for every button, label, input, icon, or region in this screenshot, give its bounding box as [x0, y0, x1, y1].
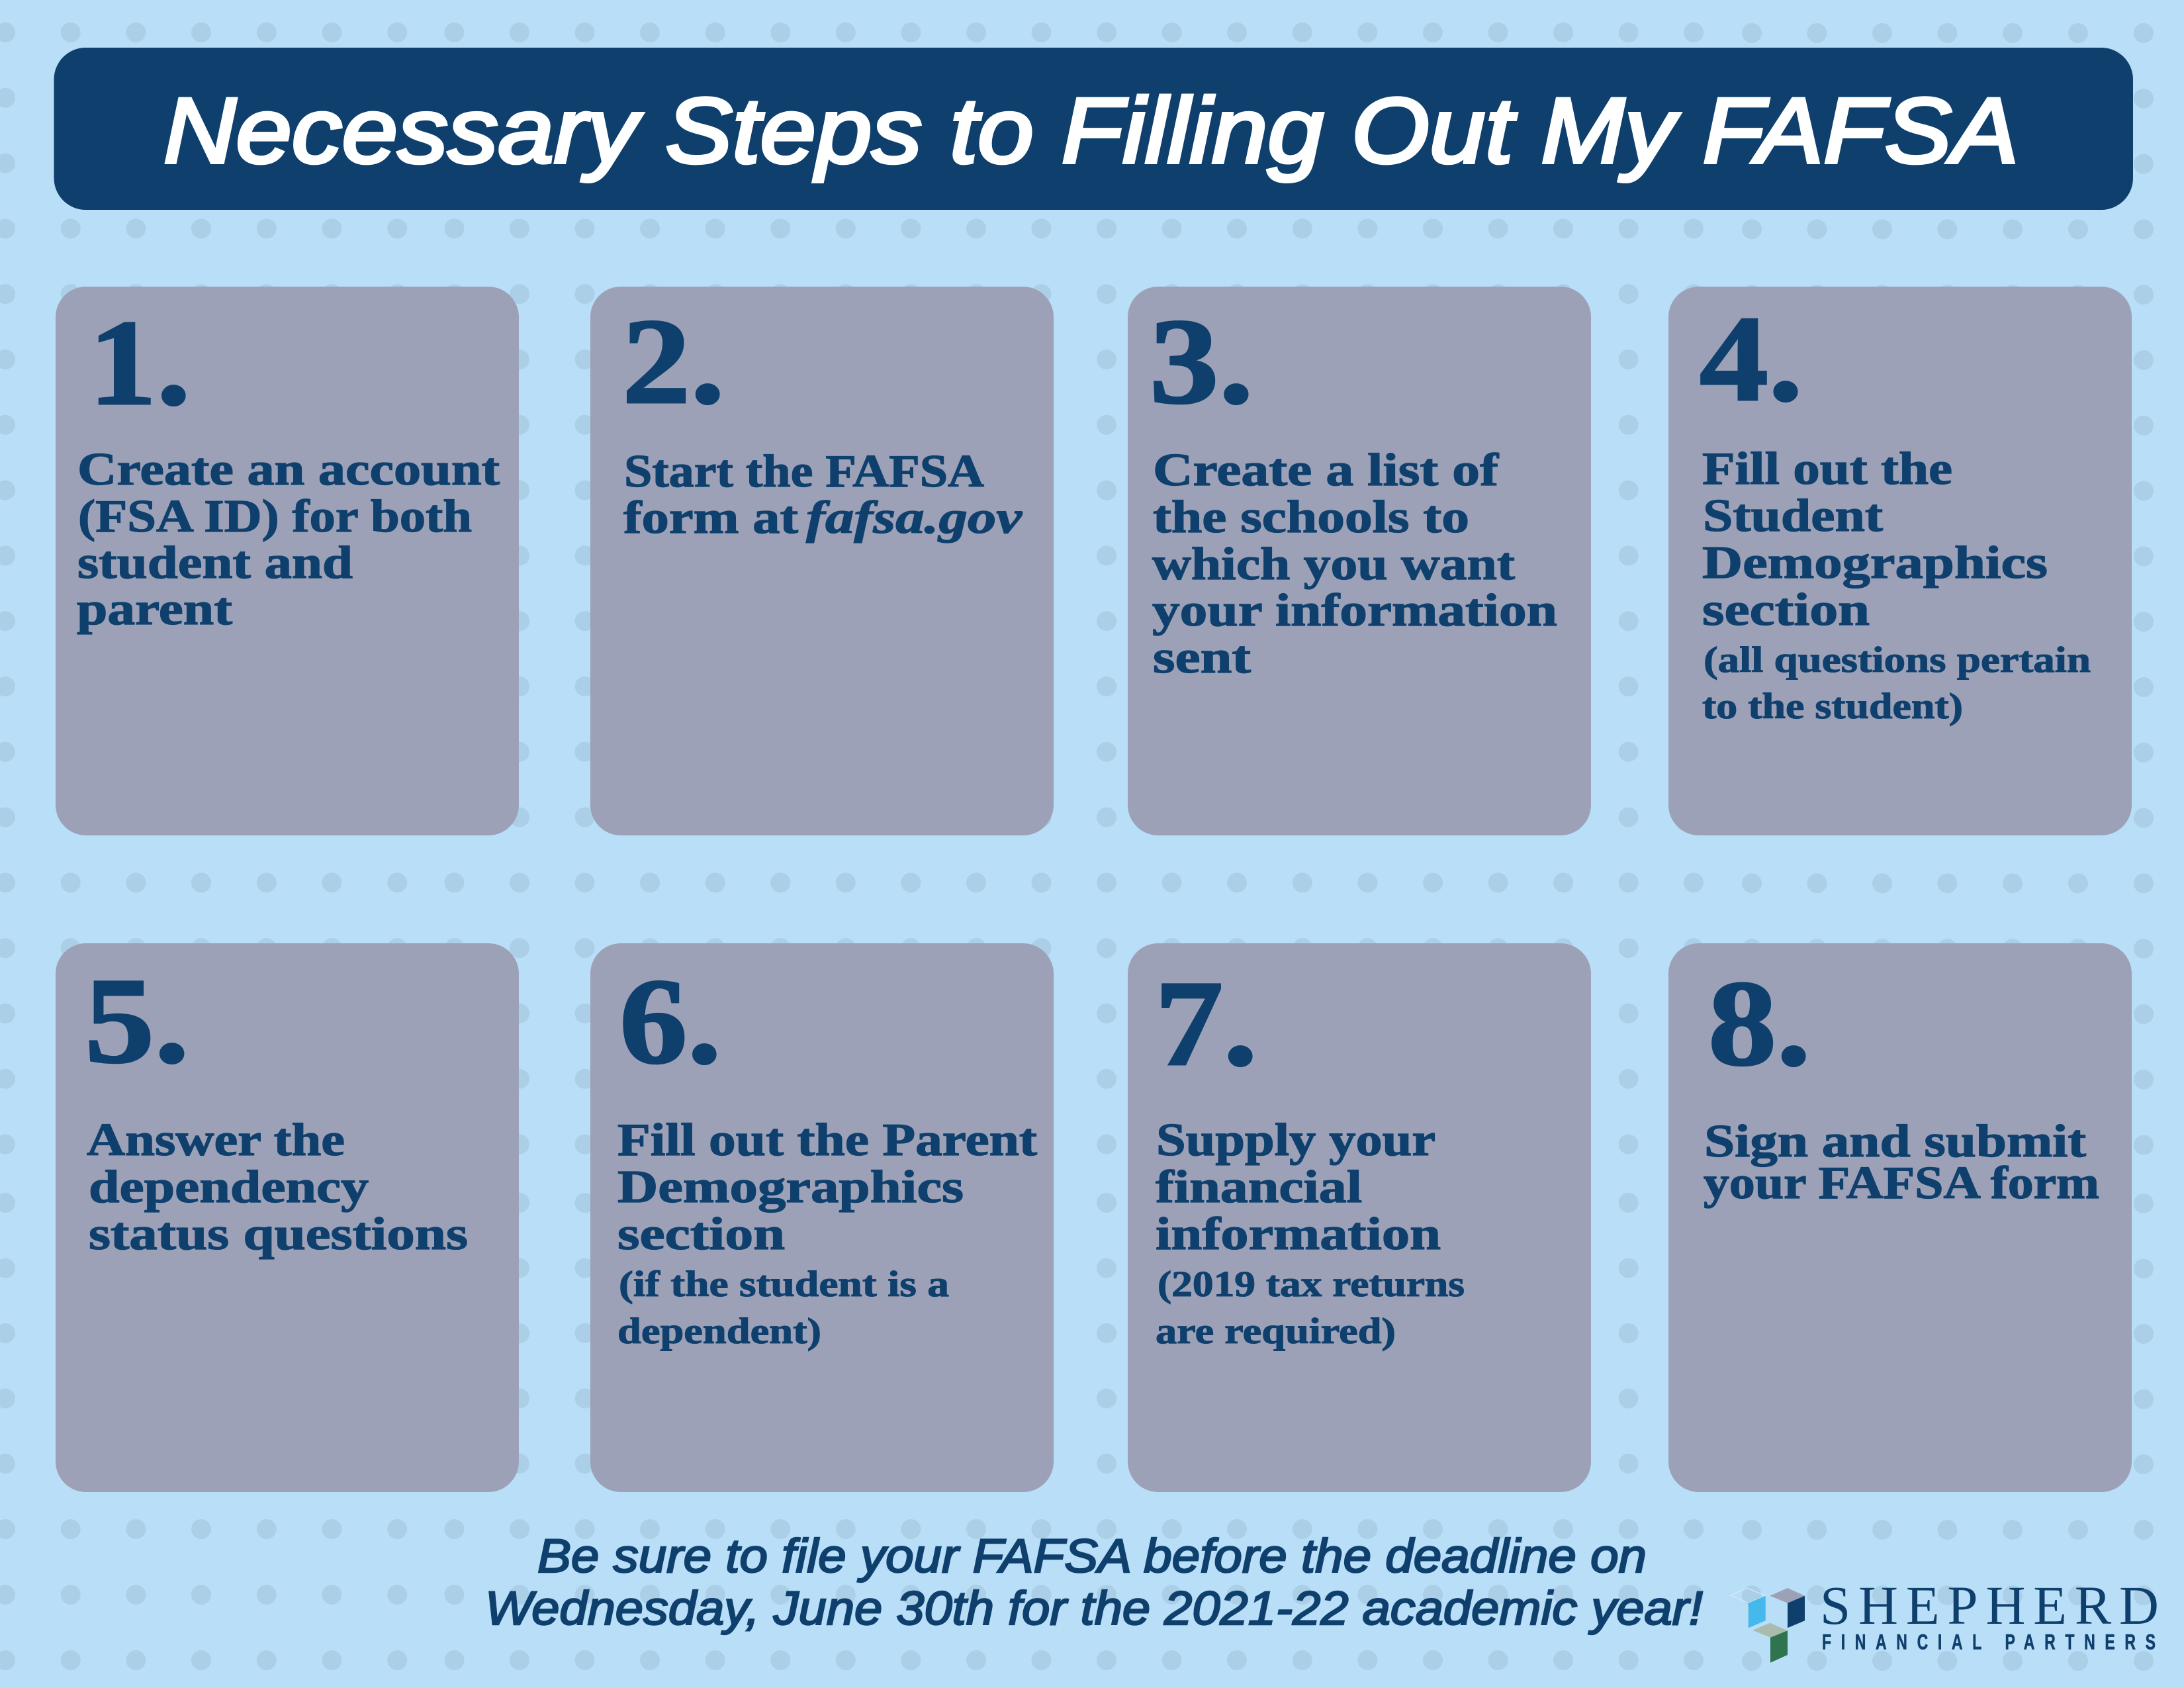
panel: step 6 — [590, 943, 1054, 1492]
step 7 text: financial — [1156, 1162, 1362, 1213]
step 4 text: section — [1702, 585, 1870, 635]
step 4 text — [1702, 444, 2091, 726]
step 8 text: your FAFSA form — [1704, 1158, 2099, 1209]
step 3 text — [1152, 445, 1557, 683]
step 3 text: sent — [1153, 632, 1251, 683]
step 1 text — [77, 444, 500, 635]
step 5 text — [87, 1115, 468, 1260]
step 6 text: Fill out the Parent — [617, 1115, 1037, 1166]
step 1 text: Create an account — [77, 444, 500, 495]
logo wordmark: SHEPHERD — [1820, 1575, 2159, 1636]
footer note: Be sure to file your FAFSA before the deadline on — [537, 1530, 1647, 1583]
title: Necessary Steps to Filling Out My FAFSA — [163, 78, 2019, 183]
step 6 text: section — [617, 1209, 785, 1260]
step 2 text: Start the FAFSA — [624, 446, 984, 497]
step 7 text: Supply your — [1156, 1115, 1435, 1166]
step 6 text: Demographics — [617, 1162, 964, 1213]
step 6 text — [617, 1115, 1037, 1351]
footer note: Wednesday, June 30th for the 2021-22 academic year! — [485, 1583, 1703, 1635]
step 4 text: Student — [1703, 491, 1883, 541]
logo tagline: FINANCIAL PARTNERS — [1822, 1630, 2156, 1654]
step 1 text: (FSA ID) for both — [78, 491, 472, 542]
icon: stacked cubes — [1731, 1588, 1805, 1663]
step 2 text: fafsa.gov — [806, 492, 1023, 543]
step 3 text: which you want — [1152, 539, 1515, 590]
step 4 text: to the student) — [1702, 686, 1963, 726]
panel: step 5 — [56, 943, 519, 1492]
step 4 text: Demographics — [1702, 538, 2048, 588]
step 5 text: Answer the — [87, 1115, 345, 1166]
panel: step 4 — [1668, 287, 2132, 835]
step 2 text — [623, 446, 1023, 543]
step 5 text: status questions — [89, 1209, 468, 1260]
step number 1: 1. — [89, 295, 191, 431]
title banner — [54, 48, 2133, 210]
step 7 text: (2019 tax returns — [1158, 1264, 1465, 1304]
step 7 text: information — [1156, 1209, 1441, 1260]
step 3 text: your information — [1152, 585, 1557, 636]
panel: step 8 — [1668, 943, 2132, 1492]
step 7 text — [1156, 1115, 1465, 1351]
step number 6: 6. — [619, 954, 721, 1090]
step number 2: 2. — [622, 294, 725, 430]
step 1 text: parent — [77, 584, 232, 635]
step 4 text: Fill out the — [1702, 444, 1952, 494]
panel: step 7 — [1128, 943, 1591, 1492]
step number 4: 4. — [1700, 291, 1803, 427]
step 2 text: form at — [623, 492, 798, 543]
panel: step 2 — [590, 287, 1054, 835]
step number 7: 7. — [1155, 956, 1257, 1092]
step 8 text: Sign and submit — [1704, 1116, 2086, 1167]
step 6 text: (if the student is a — [619, 1264, 949, 1304]
step number 3: 3. — [1150, 294, 1253, 430]
step 3 text: Create a list of — [1153, 445, 1499, 496]
step 7 text: are required) — [1156, 1311, 1396, 1351]
panel: step 1 — [56, 287, 519, 835]
step 5 text: dependency — [89, 1162, 369, 1213]
step 6 text: dependent) — [617, 1311, 821, 1351]
panel: step 3 — [1128, 287, 1591, 835]
step 8 text — [1704, 1116, 2099, 1209]
footer note — [485, 1530, 1703, 1635]
step number 8: 8. — [1708, 956, 1811, 1092]
logo: Shepherd Financial Partners — [1731, 1575, 2159, 1663]
step 3 text: the schools to — [1153, 492, 1469, 543]
step number 5: 5. — [85, 953, 189, 1089]
step 4 text: (all questions pertain — [1704, 639, 2091, 680]
step 1 text: student and — [77, 538, 353, 588]
